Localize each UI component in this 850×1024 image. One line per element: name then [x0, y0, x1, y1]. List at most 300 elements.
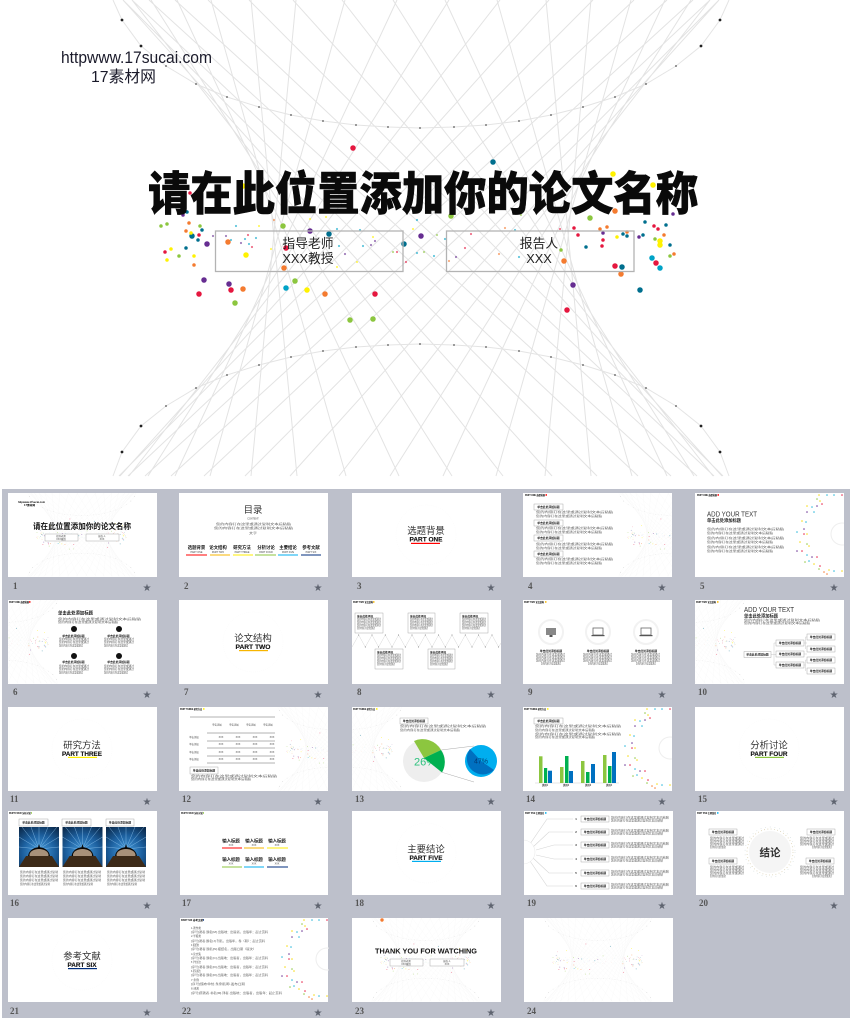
slide 22 thumbnail: reference list: 1.著作类: [191, 926, 201, 930]
slide 23 thumbnail: thank you: XXX: [445, 963, 450, 966]
slide 16 thumbnail: three photos: 单击此处添加标题: [109, 820, 131, 824]
slide 24 thumbnail: blank closing pattern: 24: [527, 1006, 536, 1016]
slide 20 thumbnail: conclusion: 您的内容打在这里或通过: [710, 865, 744, 869]
slide 11 thumbnail: part three: ★: [143, 797, 152, 808]
slide 14 thumbnail: bar chart: 您的内容打在这里或通过复制文本后粘贴: [535, 728, 596, 732]
slide 2 thumbnail: contents: 2: [184, 581, 189, 591]
slide 18 thumbnail: part five: ★: [487, 901, 496, 912]
slide 20 thumbnail: conclusion: 您的内容打在这里或通过: [800, 868, 834, 872]
slide 22 thumbnail: reference list: 2.学报类: [191, 934, 201, 938]
slide 8 thumbnail: timeline zigzag: ★: [487, 690, 496, 701]
slide 2 thumbnail: contents: 文字: [249, 531, 258, 535]
slide 17 thumbnail: six labels: XXX: [252, 844, 257, 847]
slide 4 thumbnail: text list: 您的内容打在这里或通过复制文本后粘贴: [536, 514, 603, 518]
slide 4 thumbnail: text list: 您的内容打在这里或通过复制文本后粘贴: [536, 526, 614, 530]
slide 3 thumbnail: part one: 选题背景: [407, 525, 445, 536]
slide 12 thumbnail: table: XXX: [253, 743, 258, 746]
slide 2 thumbnail: contents: 论文结构: [209, 544, 227, 551]
slide 4 thumbnail: text list: 您的内容打在这里或通过复制文本后粘贴: [536, 561, 603, 565]
thumbnail sorter background: [2, 489, 850, 1018]
slide 8 thumbnail: timeline zigzag: 您的内容打在这里或通过: [430, 662, 448, 666]
slide 12 thumbnail: table: XXX: [236, 758, 241, 761]
slide 6 thumbnail: four icon items: 您的内容打在这里或通过: [104, 670, 128, 674]
slide 4 thumbnail: text list: 您的内容打在这里或通过复制文本后粘贴: [536, 546, 603, 550]
slide 6 thumbnail: four icon items: 您的内容打在这里或通过: [59, 637, 89, 641]
slide 10 thumbnail: tree diagram: ADD YOUR TEXT: [744, 605, 794, 614]
slide 8 thumbnail: timeline zigzag: 您的内容打在这里或通过: [377, 659, 401, 663]
slide 10 thumbnail: tree diagram: 单击此处添加标题: [810, 647, 832, 651]
slide 12 thumbnail: table: XXX: [270, 758, 275, 761]
slide 9 thumbnail: three device icons: PART TWO 论文结构: [524, 600, 544, 604]
slide 22 thumbnail: reference list: [序号]著者.题名[N].报纸名，出版日期（版次）: [191, 947, 256, 951]
slide 12 thumbnail: table: 单击添加: [189, 735, 199, 739]
slide 23 thumbnail: thank you: 23: [355, 1006, 364, 1016]
slide 22 thumbnail: reference list: 8.译著: [191, 986, 199, 990]
slide 2 thumbnail: contents: CONTENT: [247, 518, 259, 520]
string art lines: [113, 0, 729, 476]
slide 9 thumbnail: three device icons: 您的内容打在这里或通过: [583, 652, 612, 656]
slide 16 thumbnail: three photos: 您的内容打在这里或通过复制: [63, 882, 93, 886]
slide 13 thumbnail: pie charts: 13: [355, 794, 364, 804]
slide 12 thumbnail: table: XXX: [270, 736, 275, 739]
slide 20 thumbnail: conclusion: 单击此处添加标题: [810, 830, 832, 834]
website watermark: httpwww.17sucai.com: [61, 48, 212, 67]
slide 6 thumbnail: four icon items: 您的内容打在这里或通过: [59, 670, 83, 674]
slide 13 thumbnail: pie charts: 47%: [474, 758, 488, 766]
slide 16 thumbnail: three photos: 您的内容打在这里或通过复制: [107, 874, 145, 878]
slide 12 thumbnail: table: 12: [182, 794, 192, 804]
slide 19 thumbnail: six numbered branches: 单击此处添加标题: [584, 830, 606, 834]
slide 17 thumbnail: six labels: 输入标题: [222, 838, 240, 844]
slide 1 thumbnail: cover: XXX教授: [56, 537, 66, 541]
slide 3 thumbnail: part one: ★: [487, 583, 496, 594]
slide 22 thumbnail: reference list: 3.报纸类: [191, 943, 199, 947]
slide 9 thumbnail: three device icons: 您的内容打在这里或通过: [541, 662, 561, 666]
slide 4 thumbnail: text list: 您的内容打在这里或通过复制文本后粘贴: [536, 542, 614, 546]
slide 6 thumbnail: four icon items: 您的内容打在这里或通过: [59, 664, 89, 668]
slide 15 thumbnail: part four: [695, 707, 844, 808]
slide 5 thumbnail: add your text: 单击此处添加标题: [707, 517, 742, 524]
slide 6 thumbnail: four icon items: 您的内容打在这里或通过: [59, 640, 89, 644]
slide 5 thumbnail: add your text: 您的内容打在这里或通过复制文本后粘贴: [707, 540, 774, 544]
slide 12 thumbnail: table: XXX: [236, 743, 241, 746]
slide 2 thumbnail: contents: 目录: [244, 504, 262, 515]
slide 10 thumbnail: tree diagram: [695, 600, 844, 698]
slide 6 thumbnail: four icon items: 您的内容打在这里或通过: [104, 640, 134, 644]
slide 8 thumbnail: timeline zigzag: 您的内容打在这里或通过: [462, 626, 480, 630]
slide 2 thumbnail: contents: PART TWO: [212, 551, 224, 554]
slide 10 thumbnail: tree diagram: 单击此处添加标题: [810, 658, 832, 662]
slide 19 thumbnail: six numbered branches: 您的内容打在这里或通过复制文本后粘贴: [611, 842, 670, 846]
slide 17 thumbnail: six labels: 输入标题: [222, 856, 240, 863]
slide 9 thumbnail: three device icons: 9: [528, 687, 533, 697]
slide 17 thumbnail: six labels: 输入标题: [245, 838, 263, 844]
slide 8 thumbnail: timeline zigzag: 您的内容打在这里或通过: [430, 653, 453, 657]
slide 8 thumbnail: timeline zigzag: 您的内容打在这里或通过: [410, 620, 433, 624]
slide 8 thumbnail: timeline zigzag: 您的内容打在这里或通过: [462, 617, 486, 621]
slide 16 thumbnail: three photos: 您的内容打在这里或通过复制: [20, 878, 58, 882]
slide 22 thumbnail: reference list: 22: [182, 1006, 192, 1016]
slide 19 thumbnail: six numbered branches: [524, 811, 673, 909]
slide 10 thumbnail: tree diagram: 单击此处添加标题: [779, 641, 801, 645]
slide 14 thumbnail: bar chart: 类别3: [585, 783, 592, 787]
slide 6 thumbnail: four icon items: 您的内容打在这里或通过: [104, 637, 134, 641]
slide 17 thumbnail: six labels: XXX: [275, 862, 280, 866]
slide 3 thumbnail: part one: 3: [357, 581, 362, 591]
slide 12 thumbnail: table: XXX: [219, 751, 224, 754]
slide 24 thumbnail: blank closing pattern: [524, 918, 673, 1016]
slide 20 thumbnail: conclusion: 您的内容打在这里或通过: [710, 845, 726, 849]
slide 20 thumbnail: conclusion: 您的内容打在这里或通过: [800, 865, 834, 869]
slide 21 thumbnail: part six: PART SIX: [68, 962, 97, 969]
slide 12 thumbnail: table: XXX: [253, 758, 258, 761]
slide 19 thumbnail: six numbered branches: 您的内容打在这里或通过复制文本后粘贴: [611, 858, 663, 862]
slide 22 thumbnail: reference list: [序号]颁布单位.条例名称.发布日期: [191, 982, 246, 986]
slide 2 thumbnail: contents: PART THREE: [235, 551, 250, 554]
slide 8 thumbnail: timeline zigzag: 您的内容打在这里或通过: [357, 620, 381, 624]
slide 19 thumbnail: six numbered branches: 单击此处添加标题: [584, 843, 606, 847]
slide 12 thumbnail: table: PART THREE 研究方法: [180, 707, 202, 711]
slide 19 thumbnail: six numbered branches: ★: [658, 901, 667, 912]
slide 8 thumbnail: timeline zigzag: PART TWO 论文结构: [353, 600, 373, 604]
slide 20 thumbnail: conclusion: 您的内容打在这里或通过: [710, 874, 726, 878]
website watermark: [61, 48, 212, 86]
slide 20 thumbnail: conclusion: 您的内容打在这里或通过: [812, 845, 832, 849]
slide 19 thumbnail: six numbered branches: 您的内容打在这里或通过复制文本后粘贴: [611, 882, 670, 886]
slide 5 thumbnail: add your text: 您的内容打在这里或通过复制文本后粘贴: [707, 545, 785, 549]
slide 18 thumbnail: part five: PART FIVE: [410, 855, 442, 862]
slide 20 thumbnail: conclusion: 单击此处添加标题: [809, 859, 831, 863]
slide 13 thumbnail: pie charts: [352, 707, 501, 805]
slide 22 thumbnail: reference list: [180, 918, 338, 1019]
slide 19 thumbnail: six numbered branches: 3: [575, 843, 577, 847]
slide 14 thumbnail: bar chart: 您的内容打在这里或通过复制文本后粘贴: [535, 724, 622, 728]
slide 10 thumbnail: tree diagram: 您的内容打在这里或通过复制文本后粘贴: [744, 621, 811, 625]
slide 20 thumbnail: conclusion: 您的内容打在这里或通过: [710, 842, 744, 846]
slide 6 thumbnail: four icon items: 单击此处添加标题: [58, 610, 94, 616]
slide 19 thumbnail: six numbered branches: 单击此处添加标题: [584, 884, 606, 888]
slide 22 thumbnail: reference list: [序号]著者.题名[J].刊名，出版年，卷（期）：起止页码: [191, 939, 265, 943]
website watermark: 17素材网: [91, 68, 156, 86]
slide 19 thumbnail: six numbered branches: 19: [527, 898, 536, 908]
slide 16 thumbnail: three photos: 您的内容打在这里或通过复制: [63, 878, 101, 882]
slide 12 thumbnail: table: XXX: [219, 736, 224, 739]
slide 20 thumbnail: conclusion: 您的内容打在这里或通过: [800, 842, 834, 846]
slide 9 thumbnail: three device icons: 单击此处添加标题: [587, 649, 609, 653]
scattered coloured dots: [161, 148, 674, 320]
slide 17 thumbnail: six labels: 17: [182, 898, 192, 908]
slide 19 thumbnail: six numbered branches: 5: [575, 871, 577, 875]
slide 10 thumbnail: tree diagram: 单击此处添加标题: [779, 652, 801, 656]
slide 1 thumbnail: cover: httpwww.17sucai.com: [18, 501, 46, 504]
slide 8 thumbnail: timeline zigzag: 您的内容打在这里或通过: [357, 617, 381, 621]
slide 12 thumbnail: table: [179, 707, 328, 805]
slide 19 thumbnail: six numbered branches: 您的内容打在这里或通过复制文本后粘贴: [611, 856, 670, 860]
slide 19 thumbnail: six numbered branches: 您的内容打在这里或通过复制文本后粘贴: [611, 886, 663, 890]
slide 21 thumbnail: part six: 21: [10, 1006, 20, 1016]
slide 20 thumbnail: conclusion: 20: [699, 898, 708, 908]
slide 8 thumbnail: timeline zigzag: 8: [357, 687, 362, 697]
slide 20 thumbnail: conclusion: 您的内容打在这里或通过: [710, 836, 744, 840]
slide 12 thumbnail: table: 您的内容打在这里或通过复制文本后粘贴: [191, 777, 252, 781]
slide 8 thumbnail: timeline zigzag: 您的内容打在这里或通过: [462, 620, 486, 624]
slide 2 thumbnail: contents: 参考文献: [302, 544, 320, 551]
slide 6 thumbnail: four icon items: 单击此处添加标题: [107, 660, 130, 664]
slide 19 thumbnail: six numbered branches: 1: [575, 817, 577, 821]
slide 4 thumbnail: text list: ★: [658, 583, 667, 594]
advisor box: [216, 231, 403, 272]
slide 17 thumbnail: six labels: ★: [314, 901, 323, 912]
slide 10 thumbnail: tree diagram: 10: [698, 687, 708, 697]
slide 18 thumbnail: part five: 主要结论: [407, 844, 445, 854]
slide 22 thumbnail: reference list: 5.学位论文: [191, 960, 201, 964]
slide 20 thumbnail: conclusion: 您的内容打在这里或通过: [812, 874, 832, 878]
slide 20 thumbnail: conclusion: 您的内容打在这里或通过: [710, 868, 744, 872]
presenter box: [446, 231, 634, 272]
slide 6 thumbnail: four icon items: ★: [143, 690, 152, 701]
slide 11 thumbnail: part three: PART THREE: [62, 751, 102, 758]
slide 4 thumbnail: text list: 您的内容打在这里或通过复制文本后粘贴: [536, 510, 614, 514]
slide 9 thumbnail: three device icons: 您的内容打在这里或通过: [588, 662, 608, 666]
slide 5 thumbnail: add your text: 5: [700, 581, 705, 591]
slide 8 thumbnail: timeline zigzag: 您的内容打在这里或通过: [357, 626, 375, 630]
slide 4 thumbnail: text list: 您的内容打在这里或通过复制文本后粘贴: [536, 530, 603, 534]
slide 6 thumbnail: four icon items: 单击此处添加标题: [62, 634, 85, 638]
slide 12 thumbnail: table: XXX: [270, 751, 275, 754]
slide 10 thumbnail: tree diagram: 单击此处添加标题: [746, 652, 769, 656]
slide 14 thumbnail: bar chart: 您的内容打在这里或通过复制文本后粘贴: [535, 732, 622, 736]
slide 19 thumbnail: six numbered branches: 4: [575, 857, 577, 861]
slide 1 thumbnail: cover: 1: [13, 581, 18, 591]
slide 8 thumbnail: timeline zigzag: 单击此处添加: [410, 614, 427, 618]
slide 20 thumbnail: conclusion: 您的内容打在这里或通过: [710, 839, 744, 843]
slide 1 thumbnail: cover: 指导老师: [56, 534, 66, 538]
advisor box: XXX教授: [282, 251, 334, 266]
slide 17 thumbnail: six labels: [180, 811, 328, 912]
slide 12 thumbnail: table: XXX: [270, 743, 275, 746]
slide 5 thumbnail: add your text: ★: [830, 583, 839, 594]
slide 19 thumbnail: six numbered branches: 您的内容打在这里或通过复制文本后粘贴: [611, 818, 663, 822]
slide 20 thumbnail: conclusion: [696, 811, 844, 912]
slide 18 thumbnail: part five: [352, 811, 501, 912]
slide 10 thumbnail: tree diagram: PART TWO 论文结构: [696, 600, 716, 604]
slide 21 thumbnail: part six: 参考文献: [63, 950, 101, 962]
slide 10 thumbnail: tree diagram: 单击此处添加标题: [779, 663, 801, 667]
slide 10 thumbnail: tree diagram: 单击此处添加标题: [810, 669, 832, 673]
slide 8 thumbnail: timeline zigzag: 您的内容打在这里或通过: [410, 623, 433, 627]
slide 12 thumbnail: table: XXX: [253, 751, 258, 754]
slide 19 thumbnail: six numbered branches: 6: [575, 884, 577, 888]
slide 4 thumbnail: text list: 单击此处添加标题: [537, 536, 560, 540]
slide 8 thumbnail: timeline zigzag: 您的内容打在这里或通过: [377, 662, 395, 666]
slide 10 thumbnail: tree diagram: ★: [830, 690, 839, 701]
slide 17 thumbnail: six labels: XXX: [275, 844, 280, 847]
slide 2 thumbnail: contents: PART FIVE: [282, 551, 294, 554]
slide 12 thumbnail: table: XXX: [219, 743, 224, 746]
slide 14 thumbnail: bar chart: ★: [658, 797, 667, 808]
slide 6 thumbnail: four icon items: 您的内容打在这里或通过: [104, 664, 134, 668]
slide 2 thumbnail: contents: 您的内容打在这里或通过复制文本后粘贴: [214, 526, 294, 530]
slide 12 thumbnail: table: 单击添加: [229, 722, 239, 726]
slide 8 thumbnail: timeline zigzag: 单击此处添加: [462, 614, 479, 618]
presenter box: XXX: [526, 251, 552, 266]
slide 8 thumbnail: timeline zigzag: 单击此处添加: [377, 650, 394, 654]
slide 20 thumbnail: conclusion: 您的内容打在这里或通过: [800, 839, 834, 843]
slide 5 thumbnail: add your text: 您的内容打在这里或通过复制文本后粘贴: [707, 527, 785, 531]
slide 19 thumbnail: six numbered branches: 您的内容打在这里或通过复制文本后粘贴: [611, 832, 663, 836]
slide 12 thumbnail: table: 单击添加: [246, 722, 256, 726]
slide 9 thumbnail: three device icons: 您的内容打在这里或通过: [583, 656, 612, 660]
slide 8 thumbnail: timeline zigzag: 您的内容打在这里或通过: [430, 659, 453, 663]
slide 8 thumbnail: timeline zigzag: 您的内容打在这里或通过: [430, 656, 453, 660]
advisor box: 指导老师: [282, 236, 334, 251]
slide 15 thumbnail: part four: PART FOUR: [750, 751, 788, 758]
slide 9 thumbnail: three device icons: 您的内容打在这里或通过: [631, 656, 660, 660]
slide 9 thumbnail: three device icons: 您的内容打在这里或通过: [636, 662, 656, 666]
slide 6 thumbnail: four icon items: 6: [13, 687, 18, 697]
slide 7 thumbnail: part two: 7: [184, 687, 189, 697]
slide 3 thumbnail: part one: PART ONE: [410, 536, 442, 544]
slide 10 thumbnail: tree diagram: 单击此处添加标题: [810, 635, 832, 639]
slide 1 thumbnail: cover: ★: [143, 583, 152, 594]
slide 16 thumbnail: three photos: 您的内容打在这里或通过复制: [107, 882, 137, 886]
slide 6 thumbnail: four icon items: [0, 600, 157, 701]
slide 9 thumbnail: three device icons: 您的内容打在这里或通过: [583, 658, 612, 662]
slide 22 thumbnail: reference list: 4.论文集: [191, 952, 201, 956]
slide 5 thumbnail: add your text: [695, 493, 850, 594]
slide 16 thumbnail: three photos: 您的内容打在这里或通过复制: [20, 882, 50, 886]
slide 2 thumbnail: contents: PART FOUR: [259, 551, 273, 554]
slide 15 thumbnail: part four: ★: [830, 797, 839, 808]
slide 8 thumbnail: timeline zigzag: 您的内容打在这里或通过: [357, 623, 381, 627]
slide 11 thumbnail: part three: 11: [10, 794, 19, 804]
slide 16 thumbnail: three photos: [8, 811, 157, 912]
slide 22 thumbnail: reference list: 7.条例: [191, 978, 199, 982]
presenter box: 报告人: [520, 236, 558, 251]
slide 20 thumbnail: conclusion: 单击此处添加标题: [712, 859, 734, 863]
slide 7 thumbnail: part two: [179, 600, 328, 701]
slide 15 thumbnail: part four: 分析讨论: [750, 740, 788, 750]
slide 9 thumbnail: three device icons: ★: [658, 690, 667, 701]
slide 14 thumbnail: bar chart: 您的内容打在这里或通过复制文本后粘贴: [535, 735, 596, 739]
slide 4 thumbnail: text list: 单击此处添加标题: [537, 552, 560, 556]
slide 19 thumbnail: six numbered branches: 您的内容打在这里或通过复制文本后粘贴: [611, 872, 663, 876]
slide 23 thumbnail: thank you: [352, 918, 501, 1019]
slide 20 thumbnail: conclusion: 您的内容打在这里或通过: [710, 871, 744, 875]
slide 14 thumbnail: bar chart: [523, 707, 681, 808]
slide 22 thumbnail: reference list: ★: [314, 1008, 323, 1019]
slide 8 thumbnail: timeline zigzag: 单击此处添加: [430, 650, 447, 654]
slide 9 thumbnail: three device icons: [523, 600, 672, 701]
slide 20 thumbnail: conclusion: 结论: [760, 846, 781, 859]
slide 8 thumbnail: timeline zigzag: 单击此处添加: [357, 614, 374, 618]
slide 5 thumbnail: add your text: PART ONE 选题背景: [697, 493, 717, 497]
slide 2 thumbnail: contents: 分析讨论: [257, 544, 275, 551]
slide 4 thumbnail: text list: 单击此处添加标题: [537, 505, 560, 509]
slide 12 thumbnail: table: 单击添加: [263, 722, 273, 726]
slide 8 thumbnail: timeline zigzag: 您的内容打在这里或通过: [410, 617, 433, 621]
slide 16 thumbnail: three photos: 您的内容打在这里或通过复制: [20, 870, 58, 874]
slide 13 thumbnail: pie charts: 26%: [414, 756, 436, 768]
slide 4 thumbnail: text list: 单击此处添加标题: [537, 521, 560, 525]
slide 14 thumbnail: bar chart: PART THREE 研究方法: [524, 707, 546, 711]
slide 16 thumbnail: three photos: 单击此处添加标题: [22, 820, 45, 824]
slide 16 thumbnail: three photos: 单击此处添加标题: [65, 820, 88, 824]
slide 21 thumbnail: part six: [8, 918, 157, 1019]
slide 7 thumbnail: part two: PART TWO: [236, 644, 271, 651]
slide 1 thumbnail: cover: [8, 493, 157, 594]
slide 13 thumbnail: pie charts: PART THREE 研究方法: [353, 707, 375, 711]
slide 7 thumbnail: part two: ★: [314, 690, 323, 701]
slide 12 thumbnail: table: 您的内容打在这里或通过复制文本后粘贴: [191, 774, 278, 778]
slide 14 thumbnail: bar chart: 单击此处添加标题: [537, 719, 560, 723]
slide 17 thumbnail: six labels: XXX: [252, 862, 257, 866]
hero slide: [61, 0, 729, 476]
slide 2 thumbnail: contents: PART SIX: [306, 551, 317, 554]
slide 17 thumbnail: six labels: 输入标题: [268, 856, 286, 863]
slide 6 thumbnail: four icon items: 您的内容打在这里或通过: [59, 644, 83, 648]
slide 12 thumbnail: table: XXX: [219, 758, 224, 761]
slide 2 thumbnail: contents: 研究方法: [233, 544, 251, 551]
slide 5 thumbnail: add your text: 您的内容打在这里或通过复制文本后粘贴: [707, 536, 785, 540]
slide 4 thumbnail: text list: 您的内容打在这里或通过复制文本后粘贴: [536, 557, 614, 561]
slide 21 thumbnail: part six: ★: [143, 1008, 152, 1019]
slide 2 thumbnail: contents: [179, 493, 328, 594]
slide 7 thumbnail: part two: 论文结构: [234, 632, 272, 644]
slide 11 thumbnail: part three: 研究方法: [63, 740, 101, 750]
slide 12 thumbnail: table: 单击添加: [189, 750, 199, 754]
slide 12 thumbnail: table: XXX: [236, 751, 241, 754]
slide 8 thumbnail: timeline zigzag: 您的内容打在这里或通过: [377, 656, 401, 660]
slide 3 thumbnail: part one: [352, 493, 501, 594]
slide 22 thumbnail: reference list: [序号]原著者.书名[M].译者.出版地：出版者，出版年：起止页码: [191, 991, 282, 995]
slide 17 thumbnail: six labels: 输入标题: [245, 856, 263, 863]
slide 15 thumbnail: part four: 15: [698, 794, 708, 804]
slide 6 thumbnail: four icon items: PART ONE 选题背景: [9, 600, 29, 604]
slide 13 thumbnail: pie charts: 单击此处添加标题: [403, 719, 425, 723]
slide 2 thumbnail: contents: 选题背景: [188, 544, 206, 551]
slide 20 thumbnail: conclusion: PART FIVE 主要结论: [697, 811, 716, 815]
slide 20 thumbnail: conclusion: ★: [830, 901, 839, 912]
slide 13 thumbnail: pie charts: 您的内容打在这里或通过复制文本后粘贴: [400, 728, 461, 732]
slide 12 thumbnail: table: 单击添加: [189, 757, 199, 761]
slide 19 thumbnail: six numbered branches: 2: [575, 830, 577, 834]
slide 8 thumbnail: timeline zigzag: [352, 600, 501, 701]
slide 17 thumbnail: six labels: XXX: [229, 862, 234, 866]
slide 17 thumbnail: six labels: XXX: [229, 844, 234, 847]
slide 20 thumbnail: conclusion: 您的内容打在这里或通过: [800, 871, 834, 875]
slide 16 thumbnail: three photos: 16: [10, 898, 20, 908]
slide 6 thumbnail: four icon items: 单击此处添加标题: [62, 660, 85, 664]
slide 1 thumbnail: cover: 请在此位置添加你的论文名称: [33, 521, 131, 531]
slide 8 thumbnail: timeline zigzag: 您的内容打在这里或通过: [410, 626, 428, 630]
slide 19 thumbnail: six numbered branches: 您的内容打在这里或通过复制文本后粘贴: [611, 844, 663, 848]
slide 1 thumbnail: cover: XXX: [100, 538, 105, 541]
slide 22 thumbnail: reference list: 6.研究报告: [191, 969, 201, 973]
slide 6 thumbnail: four icon items: 您的内容打在这里或通过复制文本后粘贴: [58, 620, 119, 624]
slide 5 thumbnail: add your text: 您的内容打在这里或通过复制文本后粘贴: [707, 531, 774, 535]
slide 16 thumbnail: three photos: 您的内容打在这里或通过复制: [107, 870, 145, 874]
slide 14 thumbnail: bar chart: 类别4: [606, 783, 613, 787]
slide 13 thumbnail: pie charts: ★: [487, 797, 496, 808]
slide 8 thumbnail: timeline zigzag: 您的内容打在这里或通过: [462, 623, 486, 627]
slide 22 thumbnail: reference list: [序号]著者.题名[D].出版地：出版者，出版年：起止页码: [191, 965, 268, 969]
slide 23 thumbnail: thank you: THANK YOU FOR WATCHING: [375, 948, 478, 956]
slide 16 thumbnail: three photos: 您的内容打在这里或通过复制: [20, 874, 58, 878]
slide 19 thumbnail: six numbered branches: 您的内容打在这里或通过复制文本后粘贴: [611, 828, 670, 832]
slide 22 thumbnail: reference list: [序号]著者.题名[M].出版地：出版者，出版年：起止页码: [191, 930, 268, 934]
slide 12 thumbnail: table: XXX: [253, 736, 258, 739]
